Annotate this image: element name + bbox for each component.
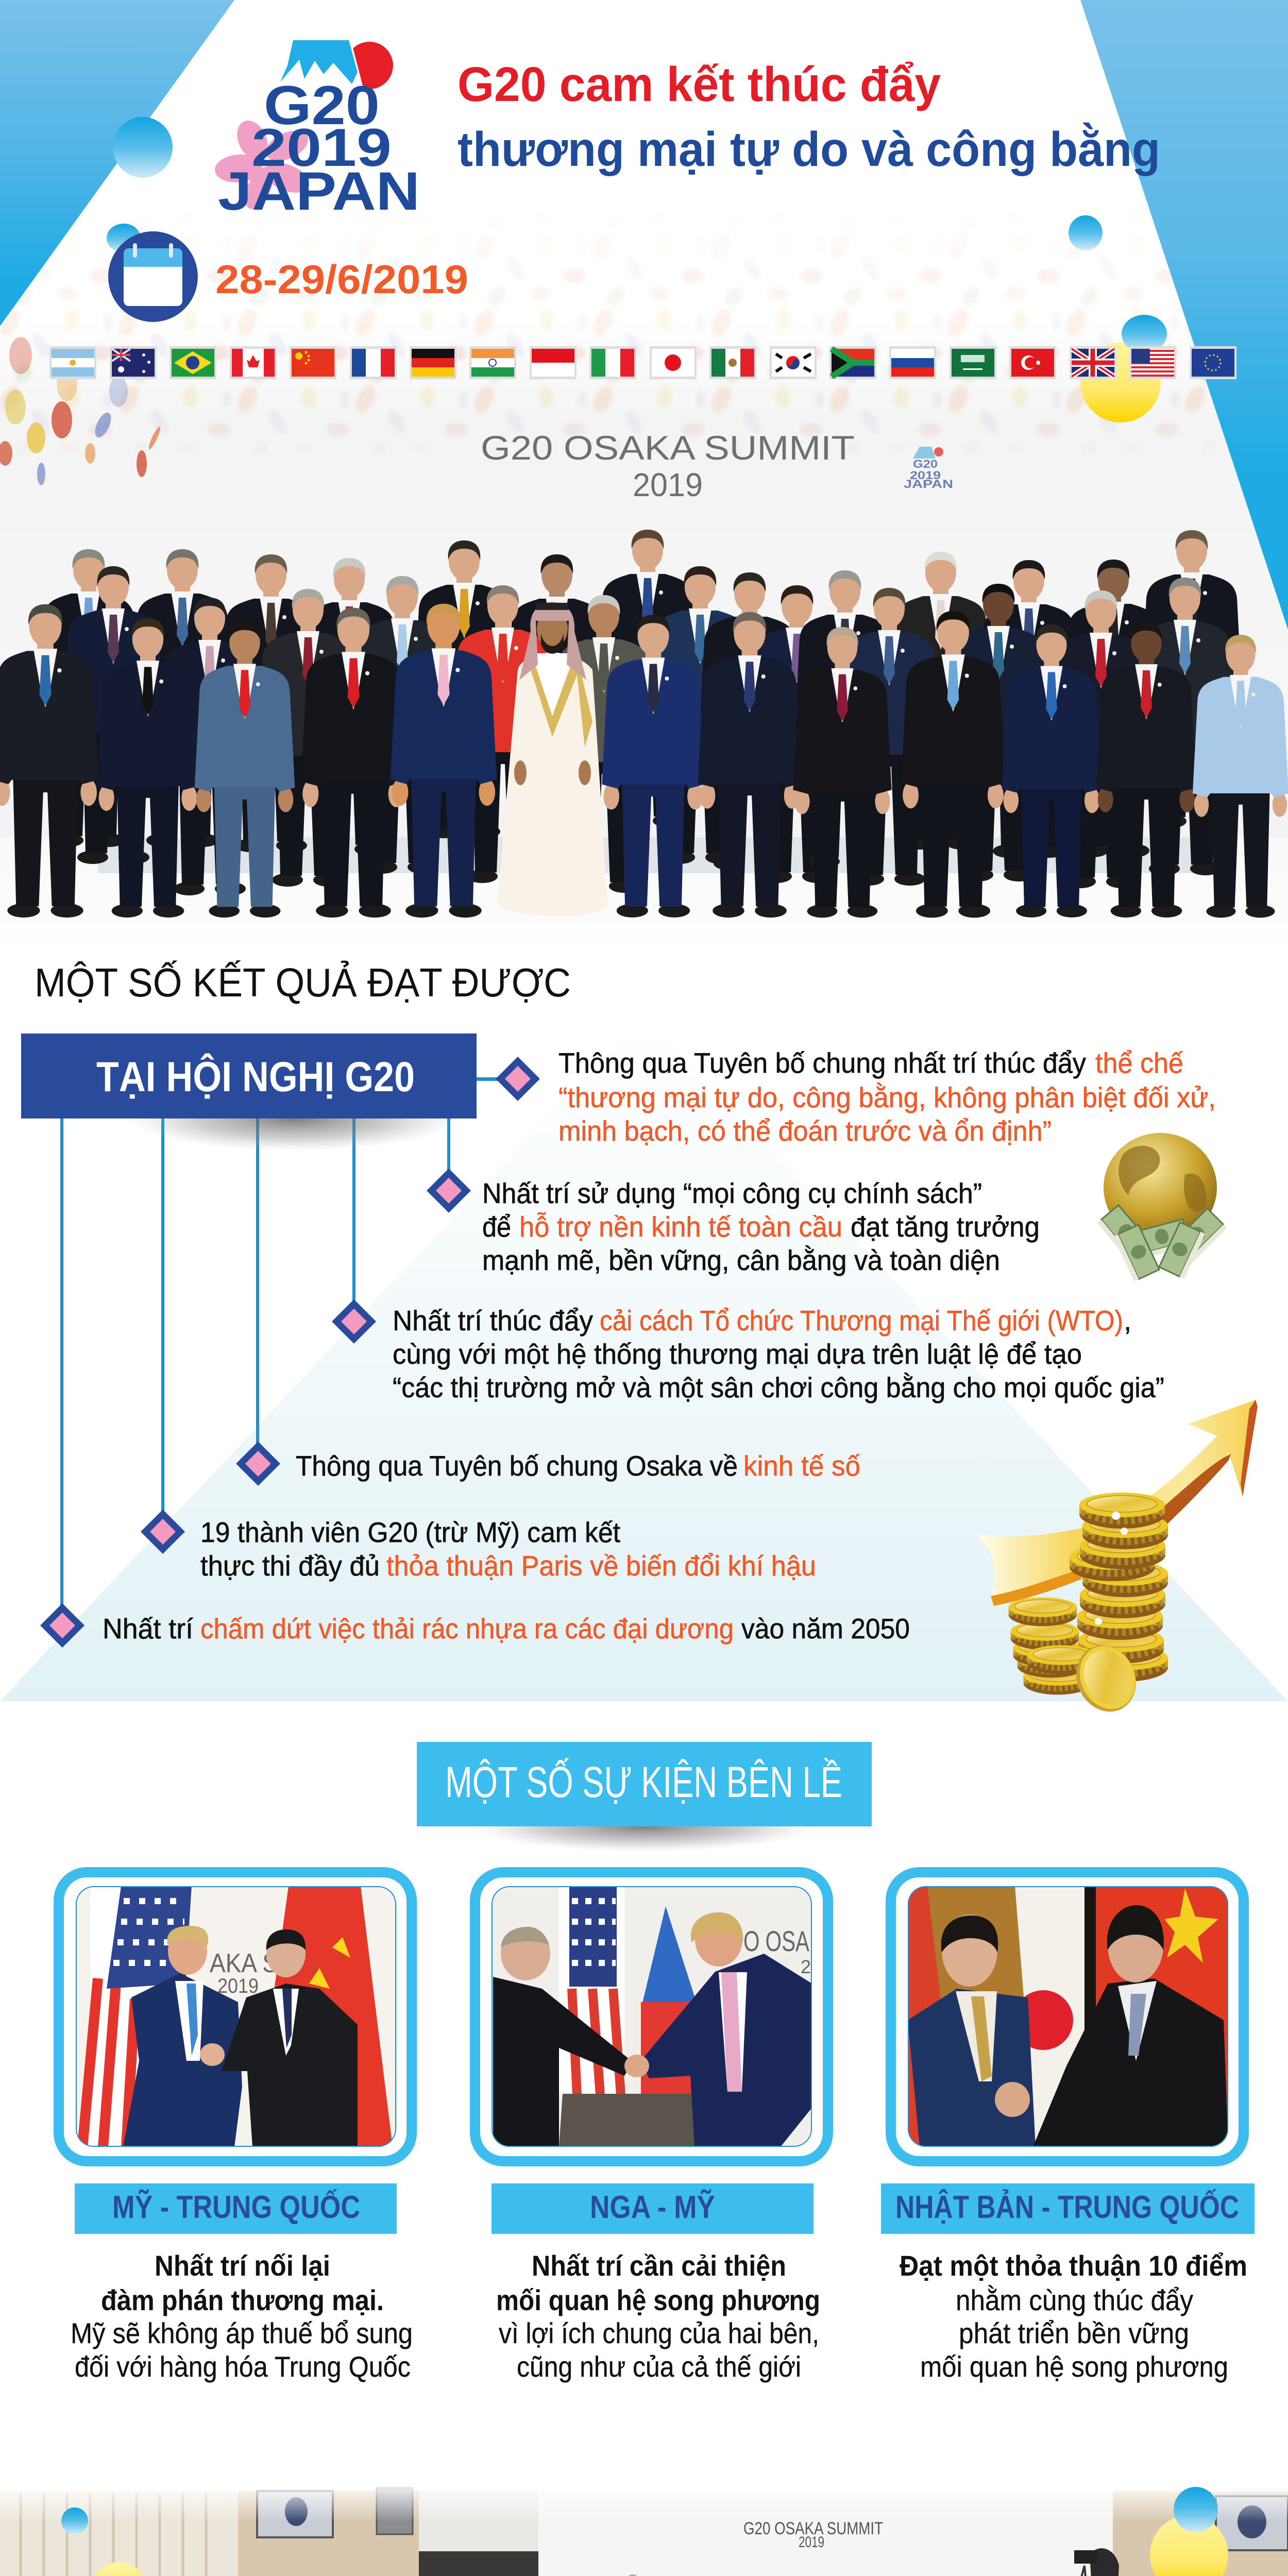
result 1: Thông qua Tuyên bố chung nhất trí thúc đẩy	[558, 1047, 1086, 1079]
label: NGA - MỸ	[590, 2190, 715, 2225]
result 6: chấm dứt việc thải rác nhựa ra các đại dương	[200, 1613, 734, 1645]
description: đối với hàng hóa Trung Quốc	[75, 2350, 411, 2383]
result 1	[496, 1047, 1216, 1147]
label	[492, 2183, 814, 2234]
G20 2019 Japan logo: G20	[264, 74, 380, 136]
timeline connector lines	[60, 1077, 500, 1608]
result 3: ,	[1124, 1304, 1131, 1336]
result 6	[40, 1603, 910, 1648]
decorative header circles	[107, 117, 1167, 422]
result 5: thực thi đầy đủ	[200, 1550, 380, 1582]
description	[71, 2249, 413, 2383]
Saudi crown prince in white robe	[497, 602, 608, 916]
result 2: mạnh mẽ, bền vững, cân bằng và toàn diện	[482, 1244, 1000, 1276]
result 4: Thông qua Tuyên bố chung Osaka về	[296, 1450, 738, 1482]
result 2: hỗ trợ nền kinh tế toàn cầu	[519, 1211, 842, 1243]
result 1: “thương mại tự do, công bằng, không phân biệt đối xử,	[558, 1081, 1216, 1113]
result 5: thỏa thuận Paris về biến đổi khí hậu	[386, 1550, 816, 1582]
icon: calendar	[108, 231, 198, 322]
description: mối quan hệ song phương	[920, 2350, 1228, 2383]
section heading: results: MỘT SỐ KẾT QUẢ ĐẠT ĐƯỢC	[35, 960, 571, 1005]
result 5	[141, 1510, 816, 1582]
title	[457, 57, 1160, 177]
result 3	[332, 1299, 1164, 1403]
result 4: kinh tế số	[743, 1450, 860, 1482]
description: mối quan hệ song phương	[496, 2284, 820, 2316]
result 2	[427, 1168, 1040, 1276]
description: Mỹ sẽ không áp thuế bổ sung	[71, 2317, 413, 2349]
stage steps	[0, 801, 1288, 920]
group photo of G20 leaders	[0, 429, 1288, 920]
photo frame: Putin and Trump: O OSA	[743, 1925, 809, 1957]
panel: Tại hội nghị G20 heading box: TẠI HỘI NGHỊ G20	[96, 1054, 415, 1100]
result 3: cùng với một hệ thống thương mại dựa trên luật lệ để tạo	[393, 1338, 1082, 1370]
result 1: thể chế	[1095, 1047, 1183, 1079]
conference room photo	[0, 2481, 1288, 2576]
result 3: cải cách Tổ chức Thương mại Thế giới (WTO)	[600, 1304, 1123, 1336]
back row of leaders	[38, 530, 1242, 858]
panel: Tại hội nghị G20 heading box	[21, 1033, 477, 1151]
result 6: Nhất trí	[103, 1613, 194, 1645]
description: Nhất trí nối lại	[155, 2249, 330, 2282]
small backdrop logo	[904, 447, 953, 490]
photo frame: Trump and Xi: AKA S	[210, 1948, 278, 1978]
result 2: Nhất trí sử dụng “mọi công cụ chính sách”	[482, 1177, 982, 1209]
description: Nhất trí cần cải thiện	[532, 2249, 786, 2282]
G20 2019 Japan logo: 2019	[251, 118, 392, 178]
backdrop text: 2019	[799, 2534, 824, 2551]
G20 2019 Japan logo	[214, 36, 420, 222]
date: 28-29/6/2019	[215, 257, 468, 302]
backdrop text: G20 OSAKA SUMMIT	[743, 2519, 883, 2538]
photo frame: Trump and Xi: 2019	[217, 1975, 259, 1997]
photo backdrop text: G20 Osaka Summit	[481, 429, 855, 503]
photo frame: Abe and Xi	[891, 1872, 1244, 2161]
section heading: side events	[417, 1742, 872, 1852]
label	[75, 2183, 397, 2234]
result 2: đạt tăng trưởng	[851, 1211, 1040, 1243]
photo frame: Putin and Trump: 2	[801, 1956, 811, 1977]
room walls and carpet	[0, 2491, 1288, 2576]
middle row of leaders	[63, 566, 1235, 895]
panel: Russia-US meeting	[475, 1872, 828, 2383]
photo frame: Trump and Xi	[59, 1872, 412, 2161]
description: nhằm cùng thúc đẩy	[956, 2284, 1193, 2316]
wall screens	[257, 2488, 1288, 2550]
decorative circles on conference photo and footer	[61, 2487, 1250, 2576]
icon: golden globe on dollar bills	[1097, 1133, 1227, 1281]
section heading: side events: MỘT SỐ SỰ KIỆN BÊN LỀ	[445, 1758, 842, 1806]
cameraman on platform	[1054, 2548, 1132, 2576]
result 4	[236, 1442, 860, 1486]
backdrop text	[743, 2519, 883, 2551]
seated delegates behind the table	[21, 2574, 1239, 2576]
small backdrop logo: G20	[913, 457, 938, 470]
description: cũng như của cả thế giới	[517, 2350, 801, 2383]
photo frame: Putin and Trump	[475, 1872, 828, 2161]
header background: white stage with blue side panels	[0, 0, 1288, 791]
photo backdrop text: G20 Osaka Summit: G20 OSAKA SUMMIT	[481, 429, 855, 467]
G20 2019 Japan logo: JAPAN	[218, 161, 420, 222]
small backdrop logo: 2019	[910, 469, 941, 482]
icon: rising gold arrow with coin stacks	[977, 1400, 1258, 1721]
description: đàm phán thương mại.	[101, 2284, 384, 2316]
front row of leaders	[0, 602, 1288, 918]
panel: Japan-China meeting	[881, 1872, 1255, 2383]
row of G20 flags	[49, 346, 1236, 379]
description	[900, 2249, 1247, 2383]
result 3: “các thị trường mở và một sân chơi công bằng cho mọi quốc gia”	[393, 1371, 1164, 1403]
title: G20 cam kết thúc đẩy	[457, 57, 941, 112]
label: MỸ - TRUNG QUỐC	[112, 2190, 360, 2225]
photo backdrop text: G20 Osaka Summit: 2019	[633, 466, 703, 503]
label	[881, 2183, 1255, 2234]
result 2: để	[482, 1211, 511, 1243]
result 1: minh bạch, có thể đoán trước và ổn định”	[558, 1115, 1052, 1147]
title: thương mại tự do và công bằng	[457, 122, 1160, 177]
description: Đạt một thỏa thuận 10 điểm	[900, 2249, 1247, 2282]
result 3: Nhất trí thúc đẩy	[393, 1304, 593, 1336]
result 6: vào năm 2050	[741, 1613, 910, 1645]
result 5: 19 thành viên G20 (trừ Mỹ) cam kết	[200, 1516, 620, 1548]
small backdrop logo: JAPAN	[904, 478, 953, 490]
pale pyramid background	[0, 1014, 1288, 1701]
description: vì lợi ích chung của hai bên,	[499, 2317, 819, 2349]
description: phát triển bền vững	[959, 2317, 1189, 2349]
panel: US-China meeting	[59, 1872, 413, 2383]
description	[496, 2249, 820, 2383]
